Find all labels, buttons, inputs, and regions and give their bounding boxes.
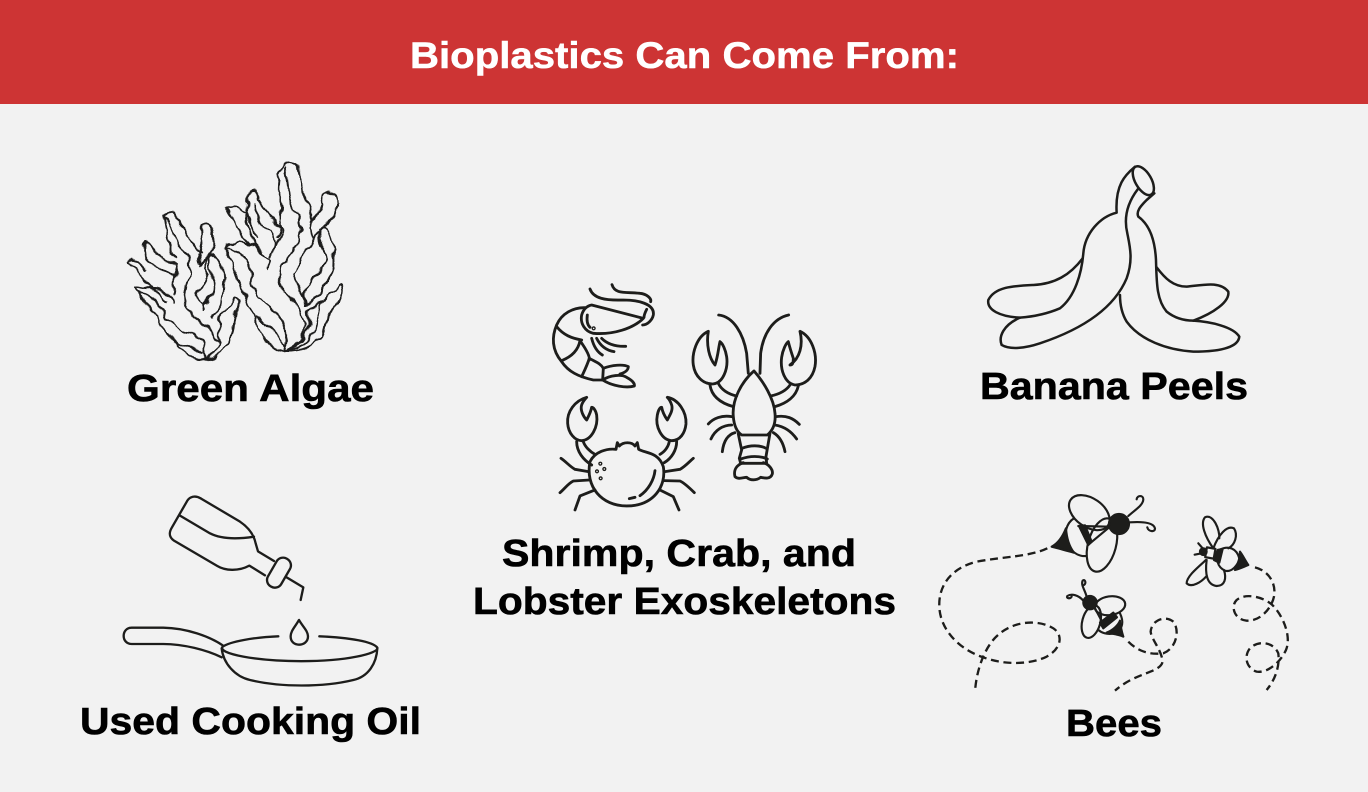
lobster — [693, 315, 815, 480]
label: shrimp, crab, and lobster exoskeletons — [473, 533, 896, 623]
oil drop — [291, 620, 308, 645]
crab — [560, 397, 694, 510]
icon: bees — [939, 488, 1288, 692]
icon: green algae — [128, 164, 343, 362]
icon: banana peels — [988, 163, 1239, 352]
bee with dashed trail, right — [1187, 517, 1288, 690]
shrimp — [553, 285, 653, 387]
bee with dashed trail, centre — [1067, 580, 1177, 691]
label: shrimp, crab, and lobster exoskeletons: Shrimp, Crab, and — [502, 533, 856, 575]
frying pan — [124, 628, 377, 685]
label: green algae: Green Algae — [127, 368, 374, 410]
label: used cooking oil: Used Cooking Oil — [80, 701, 421, 743]
label: banana peels: Banana Peels — [980, 366, 1248, 408]
icon: shrimp, crab and lobster — [553, 285, 815, 510]
header banner — [0, 0, 1368, 104]
bee with dashed trail, top left — [939, 488, 1155, 692]
bottle — [170, 497, 303, 600]
label: bees: Bees — [1066, 703, 1162, 745]
icon: used cooking oil — [124, 497, 377, 685]
title: Bioplastics Can Come From: — [410, 35, 959, 76]
label: shrimp, crab, and lobster exoskeletons: Lobster Exoskeletons — [473, 581, 896, 623]
